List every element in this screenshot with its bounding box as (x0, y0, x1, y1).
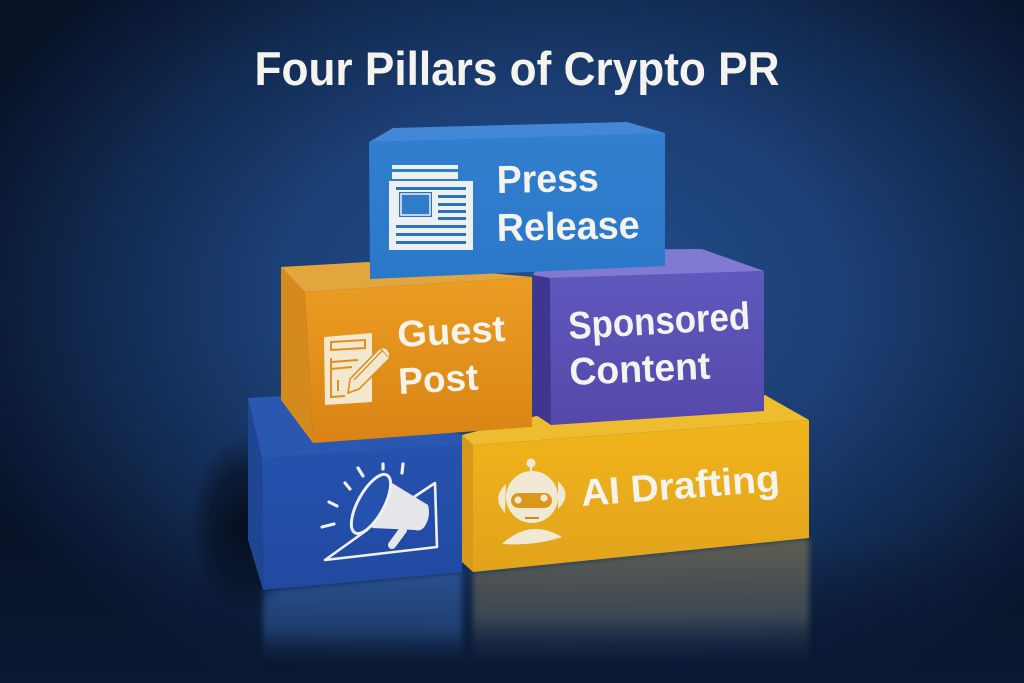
icon: document and pencil (324, 333, 390, 405)
block: Press Release (top) (369, 122, 665, 279)
block: Sponsored Content (middle right): Content (568, 345, 711, 394)
icon: megaphone (322, 464, 437, 560)
label: Sponsored Content: Sponsored (567, 295, 751, 348)
block: megaphone (bottom left) (248, 395, 462, 590)
icon: newspaper (389, 165, 473, 250)
block: Press Release (top): Release (496, 204, 640, 250)
block: AI Drafting (bottom right) (462, 395, 809, 572)
icon: robot (498, 458, 566, 544)
floor reflections (263, 538, 809, 668)
label: Guest Post: Guest (396, 308, 506, 355)
shadow beside the stack (190, 435, 300, 615)
label: AI Drafting: AI Drafting (580, 458, 781, 515)
title: Four Pillars of Crypto PR (254, 42, 780, 95)
block: Guest Post (middle left): Post (397, 357, 479, 402)
block: Guest Post (middle left) (281, 262, 532, 443)
label: Press Release: Press (496, 157, 599, 202)
block: Sponsored Content (middle right) (533, 249, 764, 425)
